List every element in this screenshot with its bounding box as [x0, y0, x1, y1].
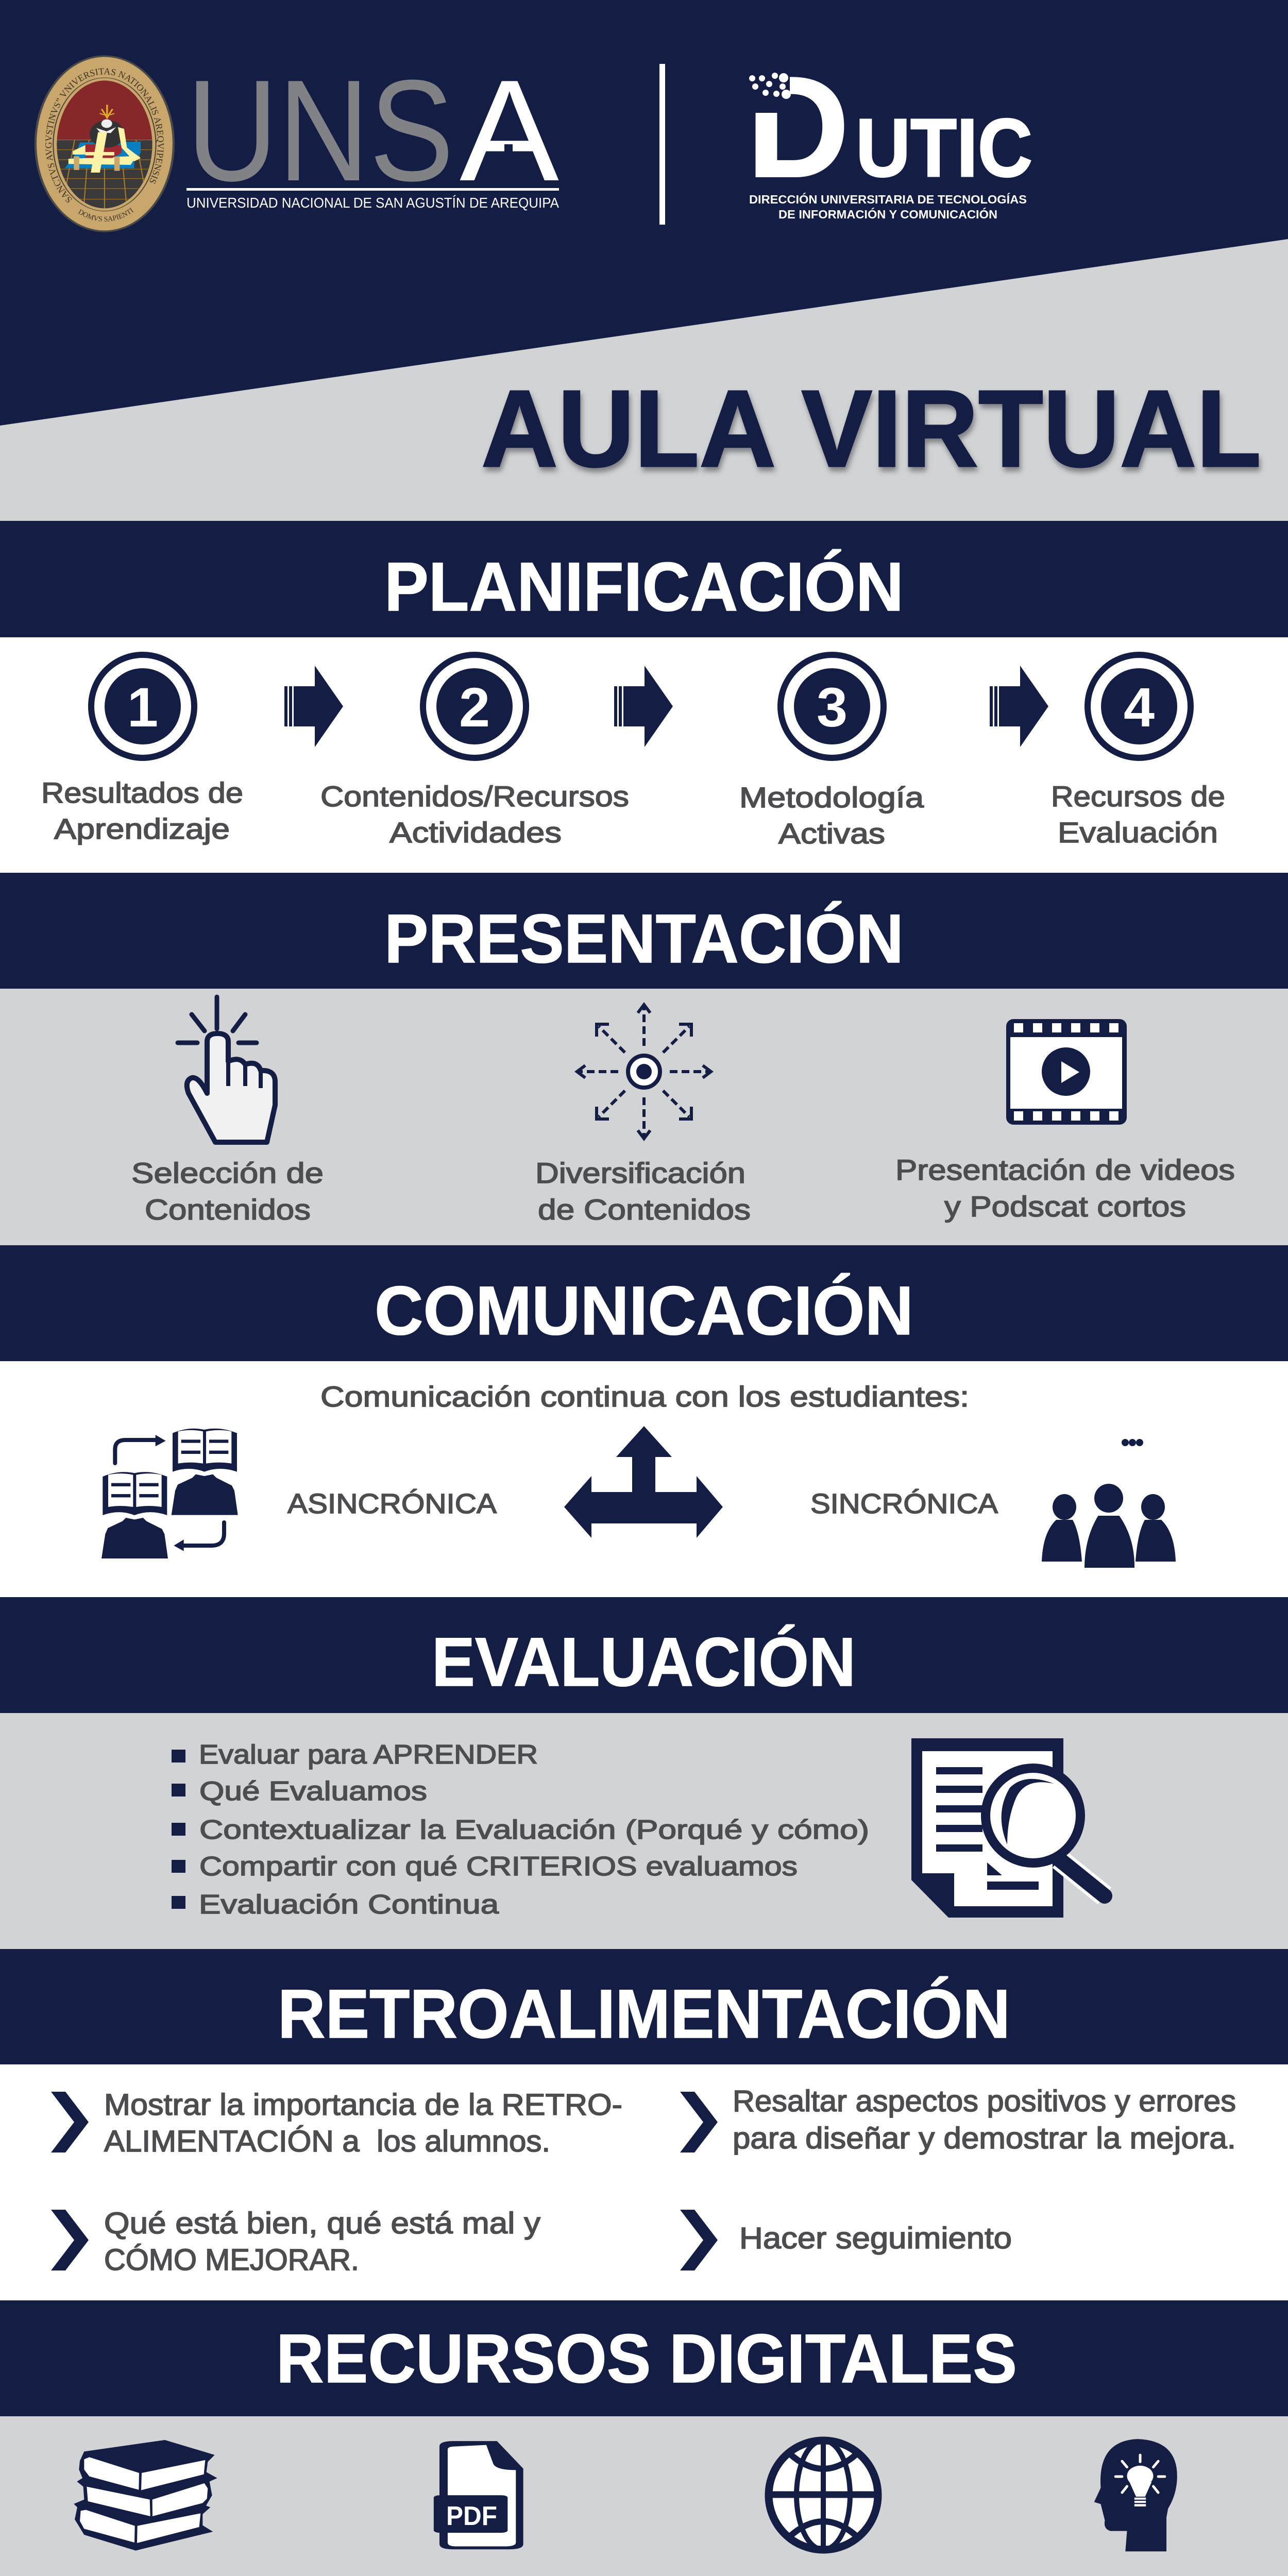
- panel: evaluación: [0, 1597, 1288, 1949]
- bullet list: Contextualizar la Evaluación (Porqué y cómo): [199, 1815, 869, 1845]
- label step 4: [1051, 780, 1225, 849]
- síncrona label: SINCRÓNICA: [810, 1488, 998, 1519]
- label selección: Contenidos: [145, 1193, 311, 1226]
- bullet list: Evaluación Continua: [199, 1890, 499, 1920]
- panel: presentación: [0, 873, 1288, 1245]
- heading: PRESENTACIÓN: [384, 901, 904, 977]
- icon: globe: [769, 2441, 878, 2550]
- crest motto: SANCTVS AVGVSTINVS” VNIVERSITAS NATIONALIS AREQVIPENSIS: [45, 68, 164, 203]
- logo: DUTIC: D: [747, 47, 850, 208]
- step 4 badge: [1088, 655, 1191, 758]
- item: resaltar: para diseñar y demostrar la mejora.: [733, 2122, 1236, 2155]
- step 2 badge: 2: [459, 676, 490, 738]
- logo: DUTIC: DE INFORMACIÓN Y COMUNICACIÓN: [778, 207, 997, 221]
- item: qué está bien: Qué está bien, qué está mal y: [104, 2207, 540, 2240]
- icon: PDF file: PDF: [446, 2501, 497, 2531]
- logo: university crest: [34, 55, 175, 232]
- label step 3: Activas: [778, 817, 885, 850]
- arrow 2: [614, 666, 673, 747]
- logo: UNSA wordmark: UNIVERSIDAD NACIONAL DE SAN AGUSTÍN DE AREQUIPA: [187, 195, 559, 211]
- heading: PLANIFICACIÓN: [384, 549, 904, 625]
- label diversificación: [535, 1157, 751, 1226]
- bullet list: Compartir con qué CRITERIOS evaluamos: [199, 1852, 798, 1882]
- panel: retroalimentación: [0, 1949, 1288, 2300]
- item: importancia: [51, 2088, 622, 2158]
- label step 4: Evaluación: [1058, 816, 1218, 849]
- step 1 badge: [91, 655, 194, 758]
- icon: video film: [1006, 1019, 1127, 1125]
- bullet list: [172, 1740, 869, 1920]
- label videos: [895, 1154, 1235, 1223]
- label diversificación: de Contenidos: [538, 1193, 751, 1226]
- icon: pointing hand: [178, 997, 275, 1142]
- step 3 badge: 3: [817, 676, 848, 738]
- step 4 badge: 4: [1124, 676, 1155, 738]
- icon: asynchronous readers: [101, 1429, 238, 1558]
- item: importancia: ALIMENTACIÓN a los alumnos.: [104, 2125, 550, 2158]
- asíncrona label: ASINCRÓNICA: [287, 1488, 497, 1519]
- heading: COMUNICACIÓN: [375, 1273, 913, 1349]
- label step 2: [320, 780, 629, 849]
- bullet list: Evaluar para APRENDER: [199, 1740, 538, 1770]
- logo: DUTIC: [744, 47, 1032, 221]
- panel: comunicación: [0, 1245, 1288, 1597]
- logo: UNSA wordmark: A: [460, 50, 560, 211]
- label step 1: Resultados de: [41, 776, 243, 809]
- label videos: Presentación de videos: [895, 1154, 1235, 1186]
- item: qué está bien: [51, 2207, 540, 2277]
- logo: DUTIC: DIRECCIÓN UNIVERSITARIA DE TECNOLOGÍAS: [749, 192, 1027, 206]
- item: qué está bien: CÓMO MEJORAR.: [104, 2243, 359, 2277]
- label step 2: Actividades: [389, 816, 562, 849]
- icon: document with magnifier: [911, 1738, 1105, 1918]
- icon: head with light bulb: [1094, 2439, 1177, 2551]
- item: resaltar: [680, 2084, 1236, 2155]
- label step 3: Metodología: [739, 781, 924, 814]
- label step 1: Aprendizaje: [54, 812, 230, 845]
- label step 3: [739, 781, 924, 850]
- label selección: [131, 1157, 324, 1226]
- item: importancia: Mostrar la importancia de la RETRO-: [104, 2088, 622, 2122]
- label diversificación: Diversificación: [535, 1157, 745, 1189]
- heading: RECURSOS DIGITALES: [276, 2320, 1017, 2397]
- label videos: y Podscat cortos: [944, 1190, 1186, 1223]
- heading: RETROALIMENTACIÓN: [278, 1976, 1010, 2053]
- label step 1: [41, 776, 243, 845]
- label step 4: Recursos de: [1051, 780, 1225, 812]
- icon: group of people: [1042, 1439, 1176, 1568]
- icon: PDF file: [434, 2441, 523, 2549]
- icon: stack of books: [74, 2440, 217, 2551]
- item: resaltar: Resaltar aspectos positivos y errores: [733, 2084, 1236, 2118]
- heading: EVALUACIÓN: [432, 1624, 856, 1701]
- logo: DUTIC: UTIC: [856, 101, 1032, 194]
- label step 2: Contenidos/Recursos: [320, 780, 629, 812]
- panel: recursos digitales: [0, 2300, 1288, 2576]
- item: seguimiento: [680, 2210, 1012, 2270]
- icon: three-way arrow: [564, 1426, 723, 1538]
- logo divider: [659, 64, 665, 225]
- item: seguimiento: Hacer seguimiento: [739, 2222, 1012, 2255]
- page header banner: [0, 0, 1288, 521]
- title: AULA VIRTUAL: [481, 367, 1261, 489]
- step 1 badge: 1: [127, 676, 158, 738]
- step 2 badge: [423, 655, 526, 758]
- subtitle: Comunicación continua con los estudiantes:: [320, 1380, 969, 1413]
- label selección: Selección de: [131, 1157, 324, 1189]
- step 3 badge: [781, 655, 884, 758]
- icon: radial arrows: [577, 1005, 711, 1139]
- logo: UNSA wordmark: UNS: [187, 50, 454, 211]
- bullet list: Qué Evaluamos: [199, 1776, 427, 1806]
- arrow 3: [990, 666, 1048, 747]
- panel: planificación: [0, 521, 1288, 873]
- arrow 1: [284, 666, 343, 747]
